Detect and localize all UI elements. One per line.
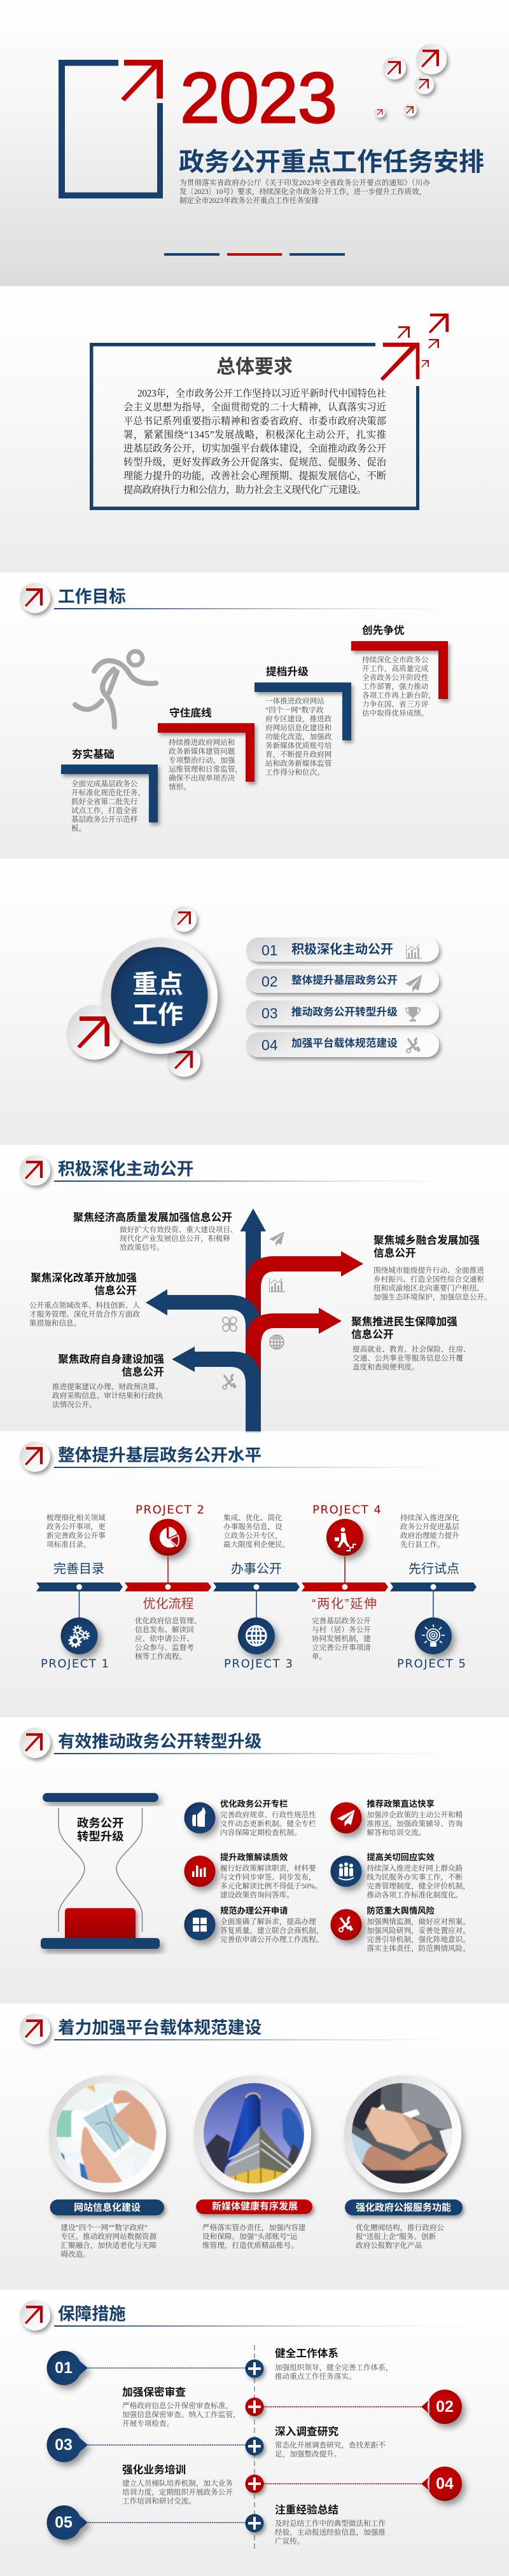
callout: government	[52, 1352, 164, 1408]
callout: urban-rural: 加强生态环境保护，加强信息公开。	[373, 1292, 492, 1301]
step 2: hold the baseline: 持续推进政府网站和	[169, 738, 235, 747]
section: work goals	[0, 572, 509, 859]
item: recommend policy	[331, 1799, 463, 1837]
measure 02: 02	[436, 2398, 454, 2416]
measure 04: 培训力度，定期组织开展政务公开	[122, 2487, 233, 2496]
icon: floating arrow badges	[375, 44, 447, 118]
step 3: raise the grade: 工作得分和位次。	[265, 767, 324, 776]
icon: bar chart	[192, 1866, 206, 1877]
step 1: solid foundation: 基层政务公开示范样	[71, 814, 138, 823]
milestone 2: 信息发布、解读回	[135, 1624, 194, 1633]
card: gazette: 政府公报数字化产品	[356, 2240, 422, 2249]
milestone 3: 最大限度利企便民。	[223, 1539, 289, 1548]
item: optimize column: 内容保障定期检查机制。	[220, 1828, 302, 1837]
milestone 2	[135, 1504, 204, 1660]
callout: livelihood: 提高就业、教育、社会保险、住房、	[352, 1345, 471, 1354]
item: public response: 持续深入推进走好网上群众路	[366, 1864, 463, 1873]
section header: transformation	[20, 1728, 484, 1758]
milestone 4: 单。	[312, 1652, 326, 1660]
callout: economy: 放政策信号。	[120, 1243, 164, 1252]
step 2: hold the baseline: 政务新媒体建管问题	[169, 747, 235, 756]
step 4: strive for excellence: 力争在国、省三方评	[362, 700, 429, 709]
card: website: 专区。推动政府网站数据资源	[60, 2231, 157, 2240]
section header: safeguards	[20, 2300, 484, 2330]
milestone 5: 政府治理能力提升	[400, 1530, 459, 1539]
icon: grid	[193, 1918, 207, 1932]
item: recommend policy: 解答和培训交流。	[366, 1828, 426, 1837]
step 4: strive for excellence: 估中取得优异成绩。	[362, 709, 428, 717]
step 3: raise the grade: 府网站信息化建设和	[265, 723, 331, 731]
callout: livelihood: 盖度和查阅便利度。	[352, 1362, 419, 1371]
measure 01: 健全工作体系	[275, 2347, 338, 2360]
milestone 5: 持续深入推进深化	[400, 1513, 459, 1521]
text block: intro	[179, 178, 430, 205]
measure 01	[47, 2347, 393, 2385]
section header: grassroots disclosure: 整体提升基层政务公开水平	[58, 1446, 261, 1465]
icon: hourglass: 转型升级	[77, 1829, 124, 1843]
text block: requirement paragraph: 2023年，全市政务公开工作坚持以习近平新时代中国特色社	[137, 388, 386, 399]
step 3: raise the grade: 一体推进政府网站	[265, 696, 324, 705]
step 3: raise the grade	[254, 665, 351, 776]
callout: livelihood	[351, 1315, 471, 1371]
milestone 4: PROJECT 4	[312, 1504, 381, 1516]
step 2: hold the baseline: 情形。	[169, 782, 191, 791]
icon: people	[338, 1862, 354, 1880]
callout: urban-rural: 围绕城市能级提升行动、全面推进	[373, 1266, 484, 1275]
circle: key work: 工作	[132, 1001, 183, 1029]
text block: requirement paragraph: 理能力提升的功能，改善社会心理预期、提振发展信心，不断	[123, 470, 386, 481]
item: policy interpretation: 多元化解读比例不得低于50%。	[220, 1881, 322, 1890]
icon: globe	[270, 1335, 284, 1349]
milestone 3: 立政务公开专区，	[223, 1530, 282, 1539]
card: gazette: 优化赠阅结构，推行政府公	[356, 2222, 445, 2231]
step 1: solid foundation: 开标准化规范化任务，	[71, 787, 145, 796]
diagram: branching arrows	[146, 1208, 363, 1432]
circle: key work	[102, 938, 218, 1054]
card: website: 汇聚融合，加快适老化与无障	[60, 2240, 157, 2249]
callout: government: 信息公开	[122, 1365, 164, 1378]
callout: livelihood: 聚焦推进民生保障加强	[351, 1315, 457, 1328]
text block: intro: 发〔2023〕10号）要求，持续深化全市政务公开工作，进一步提升工作质效，	[179, 187, 426, 196]
item: recommend policy: 准推送。加强政策辅导、咨询	[366, 1819, 463, 1828]
item: application handling: 全面准确了解诉求，提高办理	[220, 1917, 316, 1926]
milestone 1: 项标准目录。	[46, 1539, 91, 1548]
step 1: solid foundation	[61, 748, 158, 832]
milestone 3: 集成、优化、简化	[223, 1513, 282, 1521]
item: application handling: 完善依申请公开办理工作流程。	[220, 1935, 323, 1944]
item: optimize column	[185, 1799, 316, 1837]
section header: work goals: 工作目标	[58, 587, 126, 606]
callout: government: 法情况公开。	[52, 1399, 97, 1408]
step 4: strive for excellence: 各项工作再上新台阶，	[362, 691, 436, 700]
milestone 1: PROJECT 1	[41, 1658, 109, 1670]
callout: reform: 策措施和信息。	[29, 1318, 81, 1327]
measure 05: 经验，主动报送经验信息，加强推	[275, 2528, 386, 2537]
text block: intro: 为贯彻落实省政府办公厅《关于印发2023年全省政务公开要点的通知》（川办	[179, 178, 430, 187]
list item 03	[246, 1001, 439, 1025]
measure 05: 05	[55, 2514, 73, 2531]
item: recommend policy: 推荐政策直达快享	[366, 1799, 435, 1809]
item: application handling: 规范办理公开申请	[220, 1906, 288, 1916]
text block: requirement paragraph: 平总书记系列重要指示精神和省委省政府、市委市政府决策部	[123, 415, 386, 427]
icon: paper plane	[337, 1810, 355, 1827]
list item 02	[246, 969, 439, 993]
step 2: hold the baseline	[158, 706, 254, 791]
card: gazette: 报“送报上企”服务。创新	[356, 2231, 436, 2240]
card: new media: 设和保障。加强“头部账号”运	[202, 2231, 298, 2240]
item: policy interpretation	[185, 1852, 322, 1899]
item: risk prevention: 防范重大舆情风险	[366, 1906, 435, 1916]
section header: platforms	[20, 2014, 484, 2044]
milestone 2: 核等工作流程。	[135, 1651, 186, 1660]
item: optimize column: 优化政务公开专栏	[220, 1799, 288, 1809]
section header: proactive disclosure	[20, 1155, 484, 1186]
step 1: solid foundation: 抓好全省第二批先行	[71, 796, 138, 805]
icon: arrow badges	[67, 906, 200, 1077]
step 1: solid foundation: 板。	[71, 823, 86, 832]
icon: runner	[75, 651, 156, 727]
section: safeguards	[0, 2290, 509, 2576]
milestone 4: 与村（居）务公开	[312, 1624, 371, 1633]
section: grassroots disclosure	[0, 1431, 509, 1717]
callout: urban-rural: 乡村振兴、打造全国性综合交通枢	[373, 1275, 484, 1284]
card: new media: 严格落实管办责任，加强内容建	[202, 2222, 306, 2231]
step 3: raise the grade: 府专区建设，推进政	[265, 714, 332, 723]
text block: requirement paragraph: 转型升级，更好发挥政务公开促落实、促规范、促服务、促治	[123, 457, 387, 468]
step 3: raise the grade: “四个一网”数字政	[265, 705, 324, 714]
list item 01: 01	[261, 942, 278, 959]
step 1: solid foundation: 试点工作，打造全省	[71, 805, 138, 814]
callout: economy: 聚焦经济高质量发展加强信息公开	[73, 1211, 232, 1224]
milestone 2: 优化流程	[143, 1596, 193, 1611]
text block: requirement paragraph: 提高政府执行力和公信力，助力社会主义现代化广元建设。	[123, 484, 366, 495]
step 1: solid foundation: 全面完成基层政务公	[71, 779, 138, 787]
icon: gears	[69, 1626, 89, 1647]
section: transformation	[0, 1717, 509, 2004]
milestone 1	[41, 1513, 109, 1670]
item: risk prevention: 完善引导机制，强化阵地意识。	[366, 1935, 470, 1944]
measure 02: 严格政府信息公开保密审查标准，	[122, 2400, 233, 2409]
callout: economy	[73, 1211, 238, 1252]
callout: livelihood: 信息公开	[351, 1328, 394, 1341]
callout: urban-rural: 信息公开	[373, 1247, 416, 1259]
list item 01	[246, 938, 439, 962]
heading: general requirements: 总体要求	[216, 356, 293, 378]
milestone 2: PROJECT 2	[136, 1504, 204, 1516]
measure 05: 广宣传。	[275, 2537, 304, 2545]
callout: government: 推进提案建议办理、财政预决算、	[52, 1381, 163, 1390]
measure 05: 及时总结工作中的典型做法和工作	[275, 2519, 386, 2528]
item: optimize column: 完善政府规章、行政性规范性	[220, 1810, 316, 1819]
measure 05: 注重经验总结	[275, 2503, 338, 2516]
section header: safeguards: 保障措施	[58, 2304, 126, 2323]
callout: economy: 做好扩大有效投资、重大建设项目、	[120, 1225, 238, 1234]
text block: intro: 制定全市2023年政务公开重点工作任务安排	[179, 196, 319, 205]
measure 04: 工作培训和研讨交流。	[122, 2496, 196, 2505]
frame: blue bracket with red arrow	[59, 60, 163, 198]
item: public response: 推动各项工作标准化制度化。	[366, 1890, 463, 1899]
step 4: strive for excellence: 工作部署，强力推动	[362, 682, 429, 691]
measure 03: 常态化开展调查研究，查找差距不	[275, 2440, 386, 2449]
callout: urban-rural: 聚焦城乡融合发展加强	[373, 1234, 480, 1247]
icon: hourglass	[41, 1793, 160, 1949]
step 4: strive for excellence: 创先争优	[362, 623, 405, 636]
heading: year: 2023	[180, 59, 337, 137]
item: risk prevention	[331, 1906, 470, 1953]
section: key work contents	[0, 859, 509, 1145]
item: public response	[331, 1852, 470, 1899]
callout: economy: 现代化产业发展信息公开，积极释	[120, 1234, 230, 1243]
item: application handling: 答复质量。建立联合会商机制，	[220, 1926, 323, 1935]
milestone 3	[223, 1513, 293, 1670]
milestone 2: 应、依申请公开、	[135, 1633, 194, 1642]
measure 03: 深入调查研究	[275, 2425, 338, 2437]
item: risk prevention: 加强风险研判，妥善处置应对。	[366, 1926, 470, 1935]
card: website: 建设“四个一网”“数字政府”	[60, 2222, 148, 2231]
list item 03: 03	[261, 1005, 278, 1021]
measure 05	[47, 2503, 386, 2545]
circle: key work: 重点	[132, 971, 183, 999]
heading: main title: 政务公开重点工作任务安排	[179, 148, 484, 176]
step 2: hold the baseline: 确保不出现单项否决	[169, 773, 235, 782]
callout: urban-rural: 纽和成渝地区北向重要门户枢纽、	[373, 1284, 484, 1292]
milestone 1: 完善目录	[53, 1562, 104, 1576]
list item 04: 04	[261, 1037, 278, 1053]
text block: requirement paragraph: 进基层政务公开，切实加强平台载体建设，全面推动政务公开	[123, 443, 386, 454]
step 4: strive for excellence: 开工作，高质量完成	[362, 664, 429, 673]
milestone 3: 办事服务信息，设	[223, 1521, 282, 1530]
milestone 3: PROJECT 3	[224, 1658, 293, 1670]
list item 02: 整体提升基层政务公开	[291, 974, 398, 986]
milestone 2: 优化政府信息管理、	[135, 1616, 201, 1624]
icon: tools	[223, 1375, 235, 1389]
milestone 4: “两化”延伸	[312, 1596, 377, 1611]
item: policy interpretation: 与文件同步审签、同步发布，	[220, 1873, 316, 1881]
measure 02: 加强信息保密审查。纳入工作监管，	[122, 2409, 241, 2418]
step 2: hold the baseline: 运维管理和日常监管，	[169, 765, 242, 773]
section header: transformation: 有效推动政务公开转型升级	[58, 1732, 262, 1751]
item: application handling	[185, 1906, 323, 1944]
callout: reform: 聚焦深化改革开放加强	[31, 1271, 137, 1284]
milestone 4: 协同发展机制，建	[312, 1633, 371, 1642]
callout: government: 聚焦政府自身建设加强	[58, 1352, 164, 1365]
icon: chart	[269, 1278, 285, 1292]
step 3: raise the grade: 功能化改造，加强政	[265, 731, 332, 740]
list item 01: 积极深化主动公开	[291, 942, 393, 957]
section: cover	[0, 0, 509, 286]
milestone 5: PROJECT 5	[397, 1658, 466, 1670]
step 3: raise the grade: 务新媒体优质账号培	[265, 740, 332, 749]
step 3: raise the grade: 站和政务新媒体监管	[265, 758, 332, 767]
card: new media	[194, 2075, 312, 2249]
measure 02: 加强保密审查	[122, 2385, 186, 2398]
icon: clover	[223, 1317, 237, 1331]
step 2: hold the baseline: 守住底线	[169, 706, 212, 719]
callout: reform: 才服务管理、深化开放合作方面政	[29, 1309, 140, 1318]
milestone 1: 新完善政务公开事	[46, 1530, 106, 1539]
icon: pie chart	[160, 1527, 179, 1548]
callout: livelihood: 交通、公共事业等服务信息公开覆	[352, 1354, 463, 1362]
milestone 5: 先行县工作。	[400, 1539, 445, 1548]
measure 03	[47, 2425, 386, 2462]
milestone 4: 立完善公开事项清	[312, 1642, 371, 1651]
item: optimize column: 文件动态更新机制。健全专栏	[220, 1819, 316, 1828]
measure 02	[122, 2385, 462, 2427]
section: general requirements	[0, 286, 509, 572]
icon: hourglass: 政务公开	[77, 1817, 124, 1829]
callout: reform	[29, 1271, 140, 1327]
step 3: raise the grade: 育，不断提升政府网	[265, 749, 331, 758]
milestone 3: 办事公开	[231, 1562, 282, 1576]
section header: platforms: 着力加强平台载体规范建设	[58, 2018, 262, 2037]
measure 04: 04	[436, 2475, 454, 2493]
frame: requirement box	[90, 343, 419, 510]
list item 04	[246, 1032, 439, 1057]
step 1: solid foundation: 夯实基础	[72, 748, 115, 761]
image: tablet in hands	[57, 2083, 157, 2184]
measure 03: 足，加强整改提升。	[275, 2449, 341, 2458]
measure 04: 建立人员梯队培养机制，加大业务	[122, 2478, 233, 2487]
milestone 5: 政务公开促进基层	[400, 1521, 459, 1530]
measure 01: 01	[55, 2359, 73, 2377]
icon: thumbs up	[192, 1808, 206, 1827]
icon: paper plane	[269, 1231, 284, 1246]
milestone 5	[397, 1513, 466, 1670]
callout: urban-rural	[373, 1234, 492, 1301]
item: risk prevention: 加强舆情监测，做好应对预案。	[366, 1917, 470, 1926]
milestone 2: 公众参与、监督考	[135, 1642, 194, 1651]
item: public response: 完善管理制度，健全评价机制，	[366, 1881, 470, 1890]
callout: government: 政府采购信息、审计结果和行政执	[52, 1390, 163, 1399]
text block: requirement paragraph: 署，紧紧围绕“1345”发展战略，积极深化主动公开，扎实推	[123, 429, 386, 440]
icon: small red arrows	[398, 314, 449, 368]
card: gazette	[344, 2075, 463, 2249]
card: website: 网站信息化建设	[74, 2202, 141, 2213]
measure 04	[122, 2463, 462, 2505]
section header: work goals	[20, 583, 484, 613]
icon: person climbing stairs	[335, 1528, 356, 1551]
measure 04: 强化业务培训	[122, 2463, 186, 2476]
measure 03: 03	[55, 2436, 73, 2454]
milestone 1: 政务公开事项，更	[46, 1521, 106, 1530]
list item 02: 02	[261, 973, 278, 990]
item: public response: 线为民服务办实事工作，不断	[366, 1873, 463, 1881]
measure 01: 推动重点工作任务落实。	[275, 2371, 356, 2380]
step 4: strive for excellence	[351, 623, 448, 717]
step 4: strive for excellence: 持续深化全市政务公	[362, 655, 429, 664]
callout: reform: 公开重点领域改革、科技创新、人	[29, 1300, 140, 1309]
card: new media: 新媒体健康有序发展	[212, 2201, 298, 2212]
section header: grassroots disclosure	[20, 1441, 484, 1472]
icon: globe	[246, 1626, 266, 1645]
section: platforms	[0, 2004, 509, 2290]
step 4: strive for excellence: 全省政务公开阶段性	[362, 673, 429, 682]
card: new media: 维管理，打造优质精品账号。	[202, 2240, 298, 2249]
card: gazette: 强化政府公报服务功能	[356, 2202, 451, 2213]
milestone 5: 先行试点	[408, 1562, 459, 1576]
image: skyscraper	[204, 2083, 304, 2184]
card: website: 碍改造。	[60, 2249, 90, 2258]
step 3: raise the grade: 提档升级	[266, 665, 309, 678]
list item 03: 推动政务公开转型升级	[291, 1005, 398, 1018]
text block: requirement paragraph	[123, 388, 387, 495]
measure 02: 开展专项检查。	[122, 2418, 174, 2427]
section header: proactive disclosure: 积极深化主动公开	[58, 1160, 193, 1179]
icon: tools	[339, 1917, 352, 1932]
item: policy interpretation: 提升政策解读质效	[220, 1852, 288, 1862]
list item 04: 加强平台载体规范建设	[291, 1037, 398, 1049]
timeline: chevrons	[36, 1582, 477, 1591]
milestone 4: 完善基层政务公开	[312, 1616, 371, 1624]
text block: requirement paragraph: 会主义思想为指导，全面贯彻党的二十大精神，认真落实习近	[123, 401, 386, 413]
milestone 1: 梳理细化相关领域	[46, 1513, 106, 1521]
icon: light bulb target	[422, 1624, 445, 1646]
item: risk prevention: 落实主体责任，防范舆情风险。	[366, 1944, 470, 1953]
card: website	[49, 2075, 166, 2258]
measure 01: 加强组织领导，健全完善工作体系，	[275, 2362, 393, 2371]
item: recommend policy: 加强涉企政策的主动公开和精	[366, 1810, 463, 1819]
item: policy interpretation: 履行好政策解读职责，材料要	[220, 1864, 316, 1873]
callout: reform: 信息公开	[94, 1284, 137, 1296]
item: public response: 提高关切回应实效	[366, 1852, 435, 1862]
milestone 4	[312, 1504, 381, 1660]
item: policy interpretation: 建设政策咨询问答库。	[220, 1890, 294, 1899]
step 2: hold the baseline: 专项整治行动，加强	[169, 756, 235, 765]
image: stacked hands	[352, 2083, 452, 2184]
section: proactive disclosure	[0, 1145, 509, 1432]
